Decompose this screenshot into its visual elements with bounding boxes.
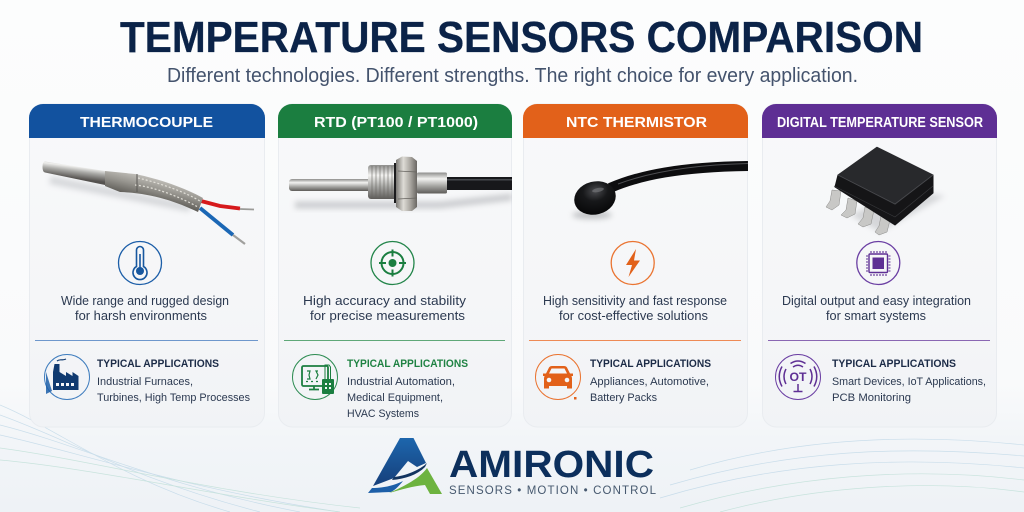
logo mark <box>368 438 442 494</box>
description: High sensitivity and fast response <box>543 293 727 308</box>
description: for harsh environments <box>75 308 207 323</box>
panel: digital temperature sensor <box>762 104 997 427</box>
applications text <box>97 358 250 404</box>
card body <box>278 104 512 427</box>
logo tagline: SENSORS • MOTION • CONTROL <box>449 485 657 497</box>
applications text <box>347 358 468 420</box>
description: for precise measurements <box>310 308 466 323</box>
icon: lightning bolt <box>611 242 654 284</box>
applications text <box>832 358 986 404</box>
description <box>543 293 727 323</box>
icon: iot: OT <box>790 372 806 384</box>
card body <box>524 104 748 427</box>
panel: ntc thermistor <box>523 104 748 427</box>
decorative waves right <box>660 439 1024 512</box>
applications text: TYPICAL APPLICATIONS <box>590 358 711 370</box>
header <box>523 104 748 138</box>
description: for smart systems <box>826 308 926 323</box>
icon: control panel <box>292 354 338 400</box>
icon: factory <box>44 354 90 400</box>
heading: THERMOCOUPLE <box>80 114 213 131</box>
description: Digital output and easy integration <box>782 293 971 308</box>
icon: target <box>371 242 414 284</box>
heading: NTC THERMISTOR <box>566 114 707 131</box>
header <box>762 104 997 138</box>
subtitle: Different technologies. Different strengths. The right choice for every application. <box>167 65 858 87</box>
applications text: Appliances, Automotive, <box>590 376 709 388</box>
decorative waves left <box>0 405 360 512</box>
icon: iot <box>776 354 820 400</box>
logo wordmark: AMIRONIC <box>449 444 654 486</box>
applications text: Smart Devices, IoT Applications, <box>832 376 986 388</box>
photo: rtd probe <box>289 156 512 211</box>
applications text: Battery Packs <box>590 392 657 404</box>
photo: thermocouple probe <box>42 162 254 244</box>
card body <box>30 104 264 427</box>
header <box>29 104 265 138</box>
applications text: TYPICAL APPLICATIONS <box>832 358 956 370</box>
applications text: Medical Equipment, <box>347 392 443 404</box>
applications text <box>590 358 711 404</box>
applications text: TYPICAL APPLICATIONS <box>97 358 219 370</box>
heading: DIGITAL TEMPERATURE SENSOR <box>777 115 983 131</box>
applications text: HVAC Systems <box>347 408 419 420</box>
description <box>782 293 971 323</box>
photo: ntc bead <box>571 164 748 219</box>
applications text: PCB Monitoring <box>832 392 911 404</box>
description: for cost-effective solutions <box>559 308 708 323</box>
photo: chip <box>826 148 945 235</box>
applications text: Turbines, High Temp Processes <box>97 392 250 404</box>
icon: processor <box>857 242 900 284</box>
description <box>303 293 467 323</box>
description <box>61 293 229 323</box>
heading: RTD (PT100 / PT1000) <box>314 114 478 131</box>
header <box>278 104 512 138</box>
card body <box>762 104 996 427</box>
applications text: Industrial Furnaces, <box>97 376 193 388</box>
applications text: TYPICAL APPLICATIONS <box>347 358 468 370</box>
icon: thermometer <box>118 242 162 284</box>
title: TEMPERATURE SENSORS COMPARISON <box>120 13 923 62</box>
description: High accuracy and stability <box>303 293 467 308</box>
panel: thermocouple <box>29 104 265 427</box>
panel: rtd <box>278 104 512 427</box>
logo: amironic <box>368 438 657 497</box>
applications text: Industrial Automation, <box>347 376 455 388</box>
icon: car <box>536 354 580 400</box>
description: Wide range and rugged design <box>61 293 229 308</box>
